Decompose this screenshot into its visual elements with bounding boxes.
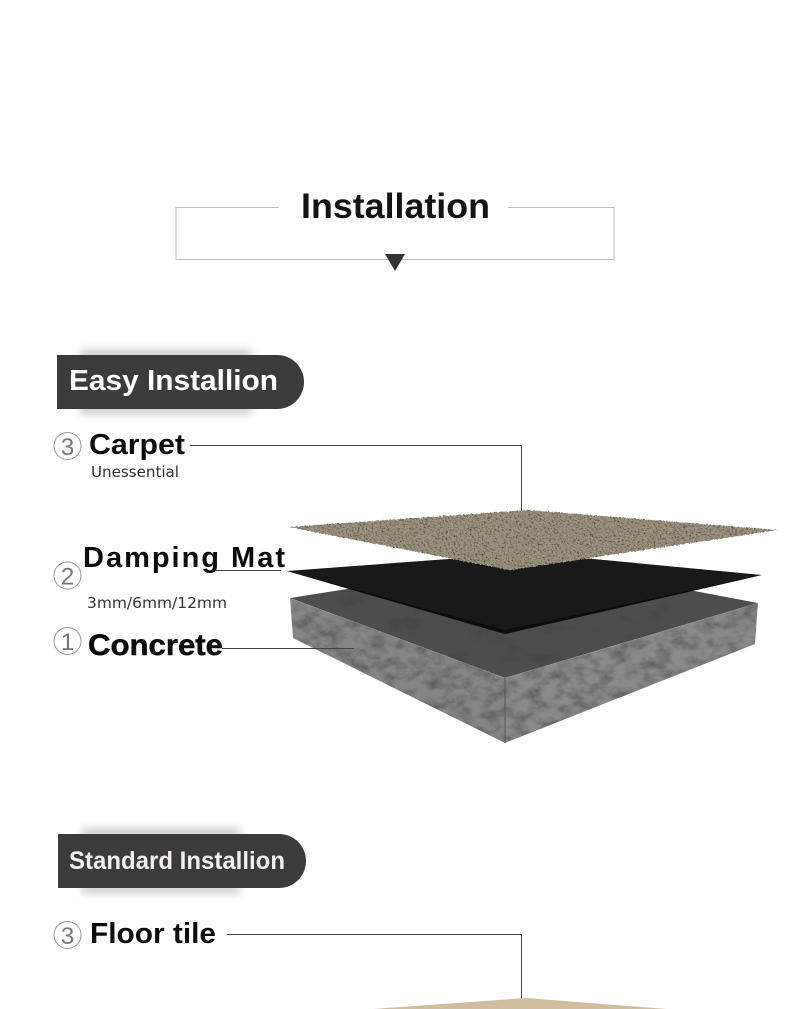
panel: Standard Installion section: [54, 830, 667, 1009]
title frame: [176, 208, 614, 260]
panel: Easy Installion section: [54, 351, 778, 743]
label: Damping Mat: Damping Mat: [83, 542, 285, 574]
label: Concrete: 1: [61, 629, 74, 656]
concrete slab: [290, 560, 758, 743]
label: Carpet: 3: [61, 434, 74, 461]
title text: Installation: [301, 187, 490, 226]
label: Carpet: Carpet: [89, 429, 185, 461]
icon: down arrow: [385, 254, 405, 271]
label: Floor tile: 3: [61, 923, 74, 950]
diagram: carpet, mat and concrete layers: [222, 510, 778, 743]
label: Concrete: Concrete: [88, 629, 223, 662]
label: Carpet: [54, 429, 522, 512]
heading: Standard Installion: Standard Installion: [69, 847, 285, 875]
floor tile layer: [373, 998, 667, 1009]
heading: Standard Installion: [58, 830, 306, 892]
carpet: [288, 510, 778, 570]
title: Installation: [176, 187, 614, 271]
heading: Easy Installion: [57, 351, 304, 413]
label: Damping Mat: 3mm/6mm/12mm: [87, 594, 227, 612]
concrete leader line: [222, 648, 354, 650]
heading: Easy Installion: Easy Installion: [69, 365, 278, 397]
label: Floor tile: Floor tile: [90, 918, 216, 950]
label: Damping Mat: [54, 542, 285, 612]
label: Carpet: Unessential: [91, 463, 179, 481]
damping mat: [287, 553, 762, 634]
label: Damping Mat: 2: [61, 564, 74, 590]
label: Floor tile: [54, 918, 522, 1001]
